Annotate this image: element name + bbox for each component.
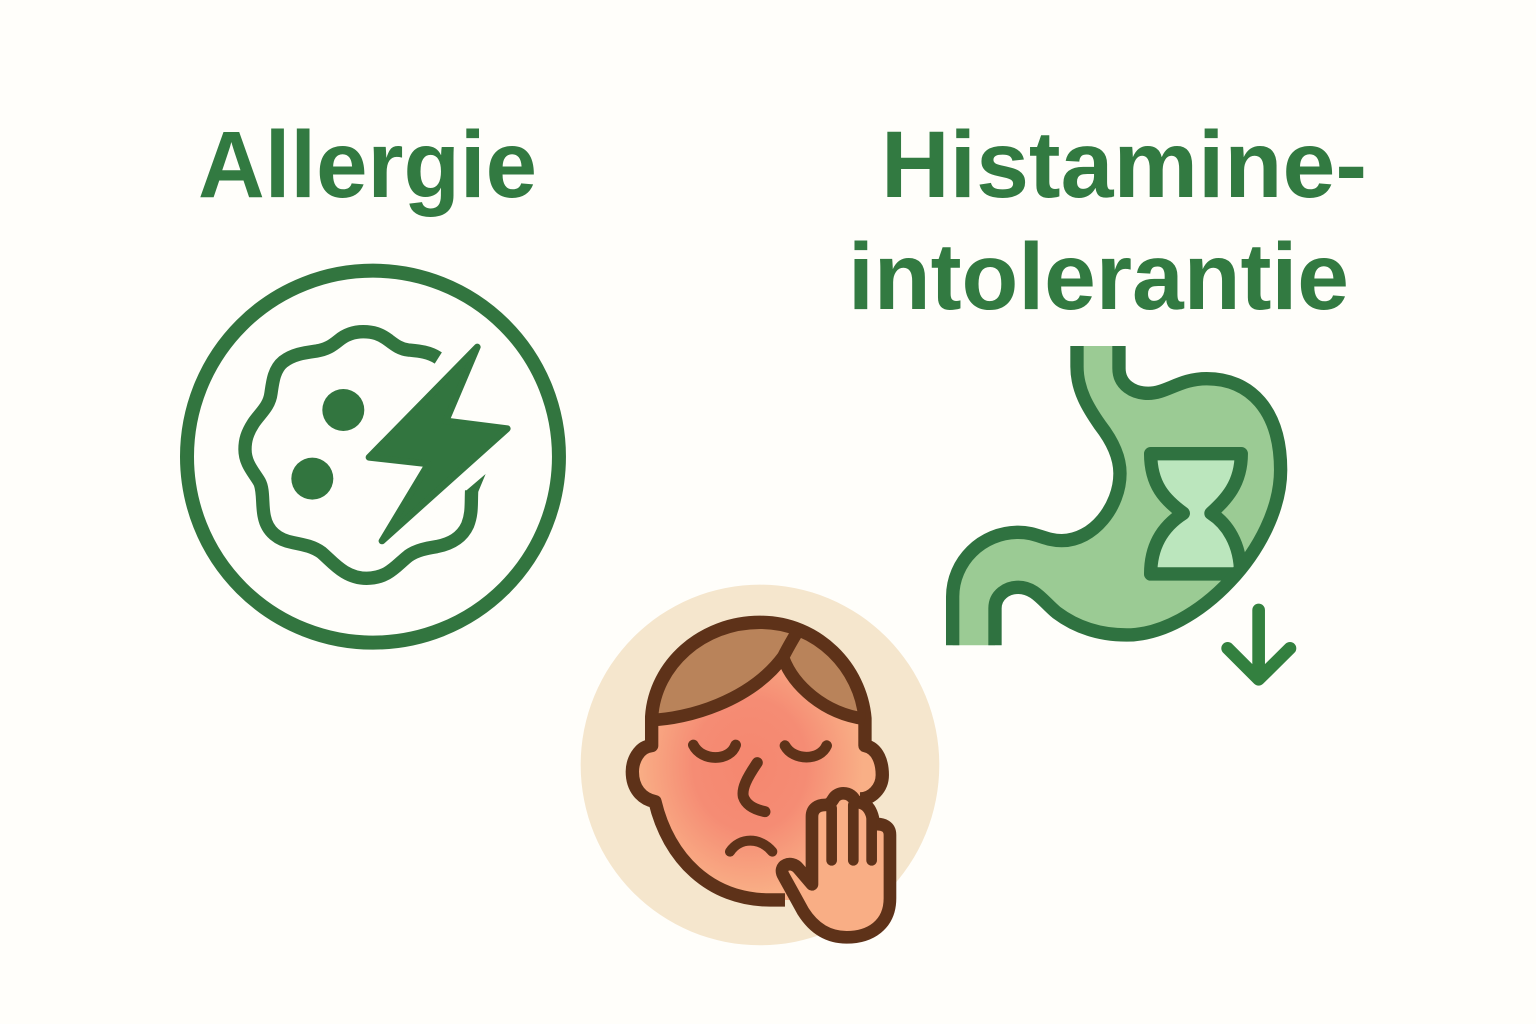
beige circle [581,585,939,945]
heading: Histamine-intolerantie: Histamine- [881,112,1367,218]
heading: Histamine-intolerantie: intolerantie [848,224,1349,330]
icon: flushed face with hand [581,585,939,945]
icon: allergy cell with lightning bolt in circle [187,271,559,643]
heading: Allergie: Allergie [198,112,537,218]
lightning bolt [369,347,507,541]
head outline [632,622,882,900]
hourglass [1151,454,1241,574]
mouth [730,841,772,852]
heading: Histamine-intolerantie [848,112,1367,330]
stomach outline [953,346,1281,645]
icon: stomach with hourglass and down arrow [953,346,1290,679]
allergen cell outline [245,332,472,578]
nose [743,763,765,812]
hair right [783,630,865,719]
cell dot upper [322,389,364,431]
outer ring [187,271,559,643]
closed eyes [693,745,827,757]
infographic canvas [180,128,1364,946]
head [632,622,882,900]
cell outline tip [465,474,486,492]
finger separators [832,805,872,860]
stomach fill [953,346,1281,645]
arrow down [1228,610,1290,679]
hair left [652,622,798,720]
hand [782,793,890,937]
cell dot lower [291,458,333,500]
hair lines [652,630,865,720]
